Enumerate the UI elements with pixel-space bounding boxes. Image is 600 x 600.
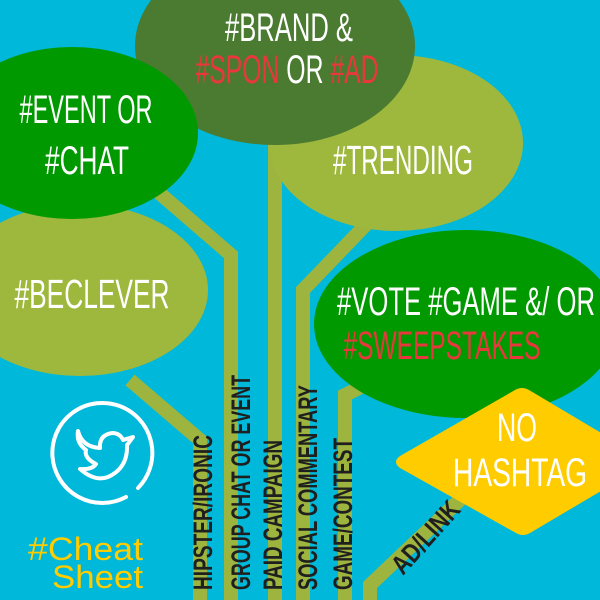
ellipse: brand: #SPON OR #AD [196,48,379,92]
text: cheat sheet: #Cheat [28,531,143,567]
vertical labels [188,375,467,590]
connector lines [130,120,465,600]
ellipse: brand: #BRAND & [225,6,353,50]
vertical labels: GROUP CHAT OR EVENT [226,375,256,590]
text: cheat sheet [28,531,143,595]
ellipse: brand [135,0,415,145]
ellipse: trending: #TRENDING [333,137,473,183]
ellipse: vote game sweepstakes [314,230,600,418]
icon: twitter circle [52,403,152,503]
ellipse: event or chat: #EVENT OR [20,88,152,132]
vertical labels: PAID CAMPAIGN [258,440,288,590]
ellipse: beclever: #BECLEVER [14,271,170,317]
ellipse: event or chat: #CHAT [45,139,129,183]
diamond: no hashtag [396,388,600,535]
text: cheat sheet: Sheet [52,559,143,595]
ellipse: beclever [0,204,208,376]
vertical labels: HIPSTER/IRONIC [188,435,218,590]
vertical labels: SOCIAL COMMENTARY [293,385,323,590]
vertical labels: GAME/CONTEST [328,438,358,590]
diamond: no hashtag: NO [497,406,537,450]
ellipse: event or chat [0,47,198,219]
ellipse: trending [269,55,523,231]
vertical labels: AD/LINK [385,494,467,580]
